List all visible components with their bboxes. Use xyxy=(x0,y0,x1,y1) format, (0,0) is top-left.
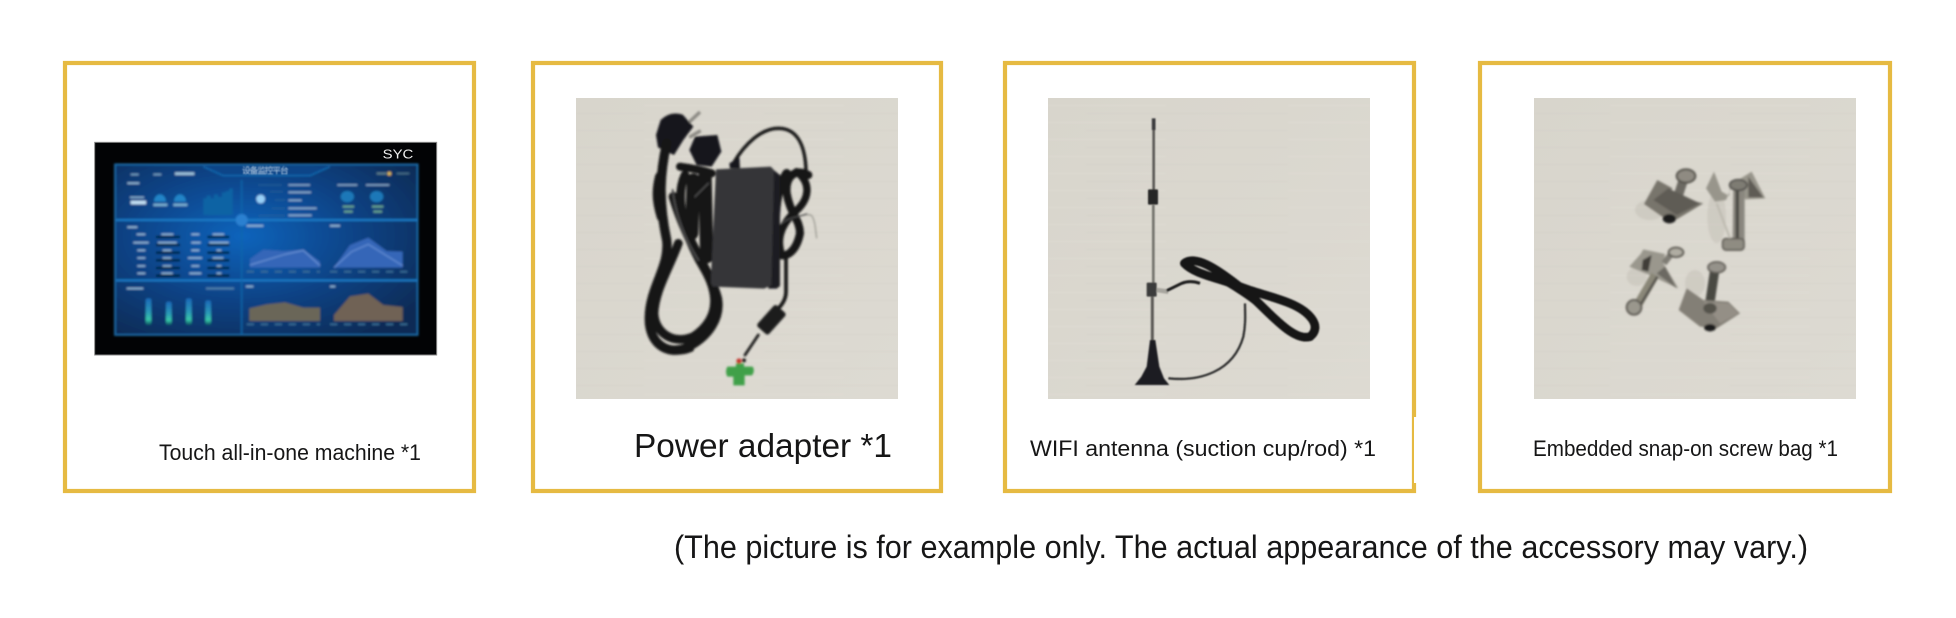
photo: power adapter and cables xyxy=(576,98,898,399)
footnote: (The picture is for example only. The actual appearance of the accessory may vary.) xyxy=(674,529,1808,565)
photo: WIFI antenna with suction cup base xyxy=(1048,98,1370,399)
panel: WIFI antenna xyxy=(1005,63,1418,491)
caption: WIFI antenna: WIFI antenna (suction cup/rod) *1 xyxy=(1030,436,1376,461)
caption: screw bag: Embedded snap-on screw bag *1 xyxy=(1533,436,1838,461)
panel: power adapter xyxy=(533,63,941,491)
caption: power adapter: Power adapter *1 xyxy=(634,427,892,464)
dashboard title: 设备监控平台 xyxy=(242,165,289,176)
caption: touch all-in-one machine: Touch all-in-one machine *1 xyxy=(159,440,421,465)
panel: touch all-in-one machine xyxy=(65,63,474,491)
brand mark: SYC: SYC xyxy=(383,147,414,162)
photo: touch screen showing dashboard xyxy=(95,142,437,355)
photo: four snap-on screws xyxy=(1534,98,1856,399)
panel: embedded snap-on screw bag xyxy=(1480,63,1890,491)
